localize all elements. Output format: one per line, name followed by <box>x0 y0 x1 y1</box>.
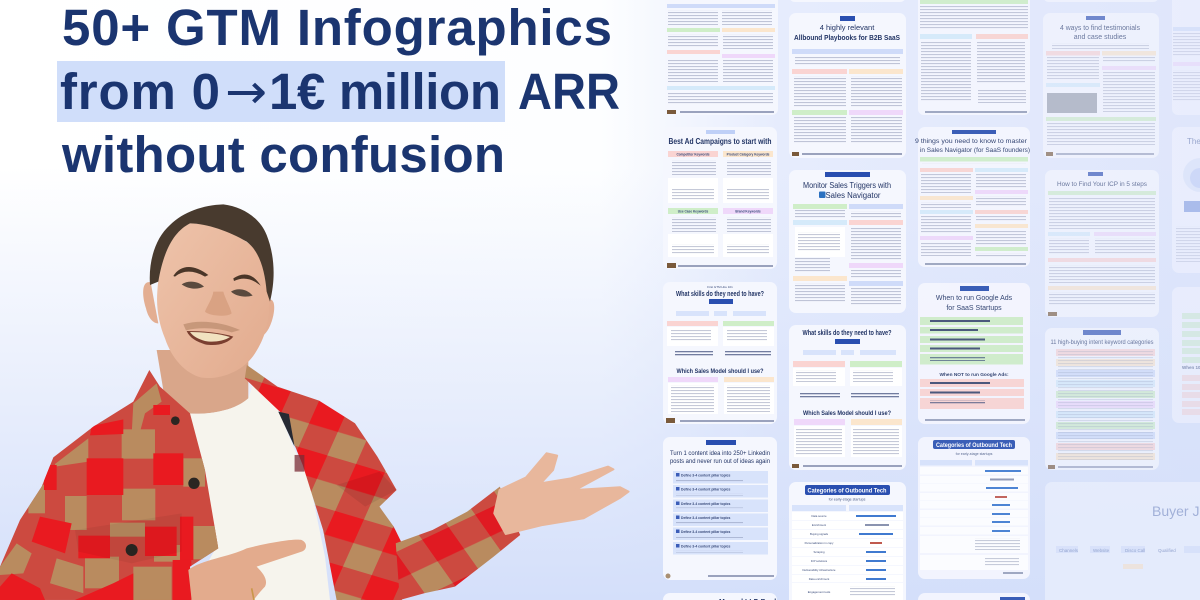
table rows: Deliverability infrastructure <box>803 568 836 572</box>
card: best ad campaigns: Competitor Keywords <box>676 152 710 156</box>
heading pill <box>933 440 1015 449</box>
flow boxes: Disco Call <box>1125 548 1145 553</box>
heading: Monitor Sales Triggers with <box>803 181 891 190</box>
title line 2 middle: 1€ million <box>269 63 501 120</box>
step rows: Define 3-4 content pillar topics <box>681 530 730 534</box>
flow boxes: Channels <box>1059 548 1079 553</box>
sleeve right <box>396 487 520 600</box>
chest logo <box>295 455 304 472</box>
title line 1: 50+ GTM Infographics <box>62 0 612 56</box>
card: allbound playbooks <box>789 13 906 158</box>
red checks <box>0 405 193 600</box>
keyword rows <box>1056 349 1155 460</box>
heading pill <box>805 485 890 495</box>
card: sales triggers <box>789 170 906 313</box>
card: turn content ideas <box>663 437 777 580</box>
title highlight <box>57 61 505 122</box>
title <box>57 0 620 183</box>
heading 2: Which Sales Model should I use? <box>676 368 764 375</box>
step rows: Define 3-4 content pillar topics <box>681 474 730 478</box>
teeth <box>190 332 230 342</box>
head <box>143 204 274 378</box>
hair <box>150 204 274 302</box>
heading: What skills do they need to have? <box>802 330 892 337</box>
card: outbound tech repeat: for early-stage startups <box>956 452 993 456</box>
card: find ICP <box>1045 170 1159 317</box>
card: cropped bottom <box>663 593 778 600</box>
table rows: Data source <box>811 514 827 518</box>
card: sales triggers: Sales Navigator <box>825 191 881 200</box>
card: testimonials <box>1043 13 1159 158</box>
column 3 <box>915 0 1030 600</box>
heading: 11 high-buying intent keyword categories <box>1050 340 1154 346</box>
card: what skills repeat <box>789 325 906 470</box>
jacket left side <box>0 367 227 600</box>
column 1 <box>663 0 778 600</box>
heading: 4 ways to find testimonials <box>1060 25 1140 32</box>
card: best ad campaigns <box>663 127 777 269</box>
buttons <box>126 416 200 556</box>
left ear <box>143 282 158 323</box>
card: cropped top <box>1043 0 1159 2</box>
jacket right side <box>245 365 628 600</box>
heading: 4 highly relevant <box>820 23 875 32</box>
title line 2 start: from 0 <box>60 63 220 120</box>
heading: 9 things you need to know to master <box>915 138 1028 145</box>
card: outbound tech: Categories of Outbound Tech <box>808 488 887 494</box>
column 2 <box>789 0 906 600</box>
presenter portrait <box>0 204 628 600</box>
card: google ads checklist <box>918 283 1030 424</box>
table rows: Personalization in copy <box>805 541 834 545</box>
heading: Best Ad Campaigns to start with <box>668 136 772 146</box>
moustache shadow <box>183 322 240 332</box>
card: testimonials: and case studies <box>1074 34 1127 41</box>
open hand <box>494 453 628 534</box>
heading: When to run Google Ads <box>936 295 1013 302</box>
table rows: Data enrichment <box>809 577 829 581</box>
heading: What skills do they need to have? <box>676 291 764 298</box>
eyes <box>182 282 253 297</box>
mouth <box>187 331 233 345</box>
table rows: ICP solutions <box>811 559 828 563</box>
ring <box>252 588 254 600</box>
title line 3: without confusion <box>61 126 505 183</box>
card: cropped right top <box>1172 0 1200 115</box>
t-shirt <box>185 383 330 600</box>
card: best ad campaigns: Use Case Keywords <box>678 210 708 214</box>
subheading: When NOT to run Google Ads: <box>939 372 1009 378</box>
face <box>157 223 269 378</box>
card: allbound playbooks: Allbound Playbooks for B2B SaaS <box>794 33 900 42</box>
column 4 (fading) <box>1043 0 1200 600</box>
step rows: Define 3-4 content pillar topics <box>681 544 730 548</box>
card: campaign overview <box>665 0 778 115</box>
right ear <box>260 299 274 337</box>
step rows: Define 3-4 content pillar topics <box>681 516 730 520</box>
checklist rows <box>920 317 1023 364</box>
card: turn content ideas: posts and never run out of ideas again <box>670 458 770 465</box>
flow boxes: Qualified <box>1158 548 1176 553</box>
card: buyer journey <box>1045 482 1200 600</box>
step rows: Define 3-4 content pillar topics <box>681 502 730 506</box>
card: best ad campaigns: Product Category Keywords <box>727 152 770 156</box>
card: outbound tech repeat <box>918 437 1030 579</box>
title arrow: → <box>225 64 267 120</box>
card: cropped bottom <box>918 593 1030 600</box>
card: what skills: First GTM Hire 101 <box>707 285 733 289</box>
card: cropped right middle <box>1172 127 1200 273</box>
pocket flap right <box>337 472 397 507</box>
card: cropped right lower: When 10 <box>1182 365 1200 370</box>
nose <box>205 292 232 316</box>
heading: Turn 1 content idea into 250+ Linkedin <box>670 450 770 457</box>
card: outbound tech <box>789 482 906 600</box>
card: outbound tech repeat: Categories of Outbound Tech <box>936 442 1012 449</box>
card: cropped plans <box>918 0 1030 115</box>
step rows: Define 3-4 content pillar topics <box>681 488 730 492</box>
pocket flap shadow <box>75 513 182 563</box>
jacket base <box>0 367 227 600</box>
column 5 (most faded) <box>1172 0 1200 423</box>
table rows <box>792 512 903 600</box>
table rows <box>920 467 1028 570</box>
card: best ad campaigns: Brand Keywords <box>735 210 761 214</box>
card: nine things <box>915 127 1030 267</box>
card: cropped top <box>789 0 906 2</box>
card: outbound tech: for early-stage startups <box>829 498 866 502</box>
inner jacket shadow <box>278 412 295 447</box>
step rows <box>673 471 768 554</box>
card: nine things: in Sales Navigator (for SaaS founders) <box>920 147 1030 154</box>
linkedin badge <box>819 192 826 198</box>
card: intent keywords <box>1045 328 1159 470</box>
pointing hand <box>188 540 306 600</box>
flow boxes <box>1056 546 1200 569</box>
heading: How to Find Your ICP in 5 steps <box>1057 181 1148 188</box>
table rows: Engagement tools <box>808 590 831 594</box>
table rows: Scraping <box>813 550 825 554</box>
warning rows <box>920 379 1024 409</box>
card: what skills <box>663 282 777 424</box>
pill <box>706 130 735 134</box>
concentric circles <box>1183 158 1200 192</box>
neck <box>157 350 248 414</box>
table rows: Enrichment <box>812 523 826 527</box>
eyebrows <box>173 267 261 286</box>
card: google ads checklist: for SaaS Startups <box>946 305 1002 312</box>
table rows: Buying signals <box>810 532 829 536</box>
title line 2 end: ARR <box>518 63 620 120</box>
heading 2: Which Sales Model should I use? <box>803 410 891 417</box>
infographic wall <box>663 0 1200 600</box>
card: cropped right lower <box>1172 287 1200 423</box>
flow boxes: Website <box>1093 548 1110 553</box>
tan checks <box>0 383 219 600</box>
